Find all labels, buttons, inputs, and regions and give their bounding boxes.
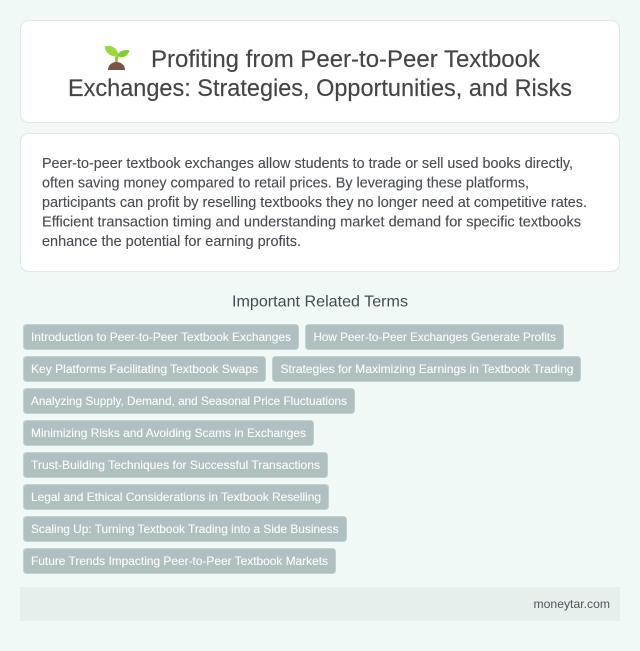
tag: supply and demand: Analyzing Supply, Demand, and Seasonal Price Fluctuations bbox=[31, 394, 347, 408]
tag: scaling bbox=[24, 516, 346, 542]
tag: introduction: Introduction to Peer-to-Peer Textbook Exchanges bbox=[31, 330, 291, 344]
tag: future trends: Future Trends Impacting Peer-to-Peer Textbook Markets bbox=[31, 554, 328, 568]
description text: Efficient transaction timing and understanding market demand for specific textbooks bbox=[42, 214, 581, 230]
tag: trust bbox=[24, 452, 328, 478]
title text: Profiting from Peer-to-Peer Textbook bbox=[151, 46, 541, 73]
tag: strategies bbox=[272, 356, 580, 382]
description text bbox=[42, 156, 587, 250]
tag: scaling: Scaling Up: Turning Textbook Trading into a Side Business bbox=[31, 522, 338, 536]
tag: future trends bbox=[24, 548, 336, 574]
tag: risks bbox=[24, 420, 314, 446]
panel: description card bbox=[20, 134, 620, 272]
title text bbox=[68, 46, 572, 102]
description text: often saving money compared to retail prices. By leveraging these platforms, bbox=[42, 176, 529, 192]
icon: sprout bbox=[104, 46, 130, 70]
tag: legal bbox=[24, 484, 328, 510]
tag: strategies: Strategies for Maximizing Earnings in Textbook Trading bbox=[280, 362, 574, 376]
tag: trust: Trust-Building Techniques for Successful Transactions bbox=[31, 458, 320, 472]
tag: legal: Legal and Ethical Considerations in Textbook Reselling bbox=[31, 490, 321, 504]
tag: introduction bbox=[24, 324, 298, 350]
heading: related terms: Important Related Terms bbox=[232, 294, 408, 310]
title text: Exchanges: Strategies, Opportunities, and Risks bbox=[68, 75, 572, 102]
tag: profits bbox=[306, 324, 564, 350]
footer: moneytar.com bbox=[534, 597, 610, 611]
description text: enhance the potential for earning profits. bbox=[42, 234, 301, 250]
tag: platforms bbox=[24, 356, 266, 382]
panel: title card bbox=[20, 20, 620, 122]
tag: supply and demand bbox=[24, 388, 354, 414]
tag: profits: How Peer-to-Peer Exchanges Generate Profits bbox=[314, 330, 556, 344]
description text: Peer-to-peer textbook exchanges allow students to trade or sell used books directly, bbox=[42, 156, 573, 172]
footer bbox=[20, 587, 620, 621]
panel: term tags bbox=[24, 324, 580, 574]
tag: risks: Minimizing Risks and Avoiding Scams in Exchanges bbox=[31, 426, 306, 440]
tag: platforms: Key Platforms Facilitating Textbook Swaps bbox=[31, 362, 258, 376]
description text: participants can profit by reselling textbooks they no longer need at competitive rates. bbox=[42, 195, 587, 211]
